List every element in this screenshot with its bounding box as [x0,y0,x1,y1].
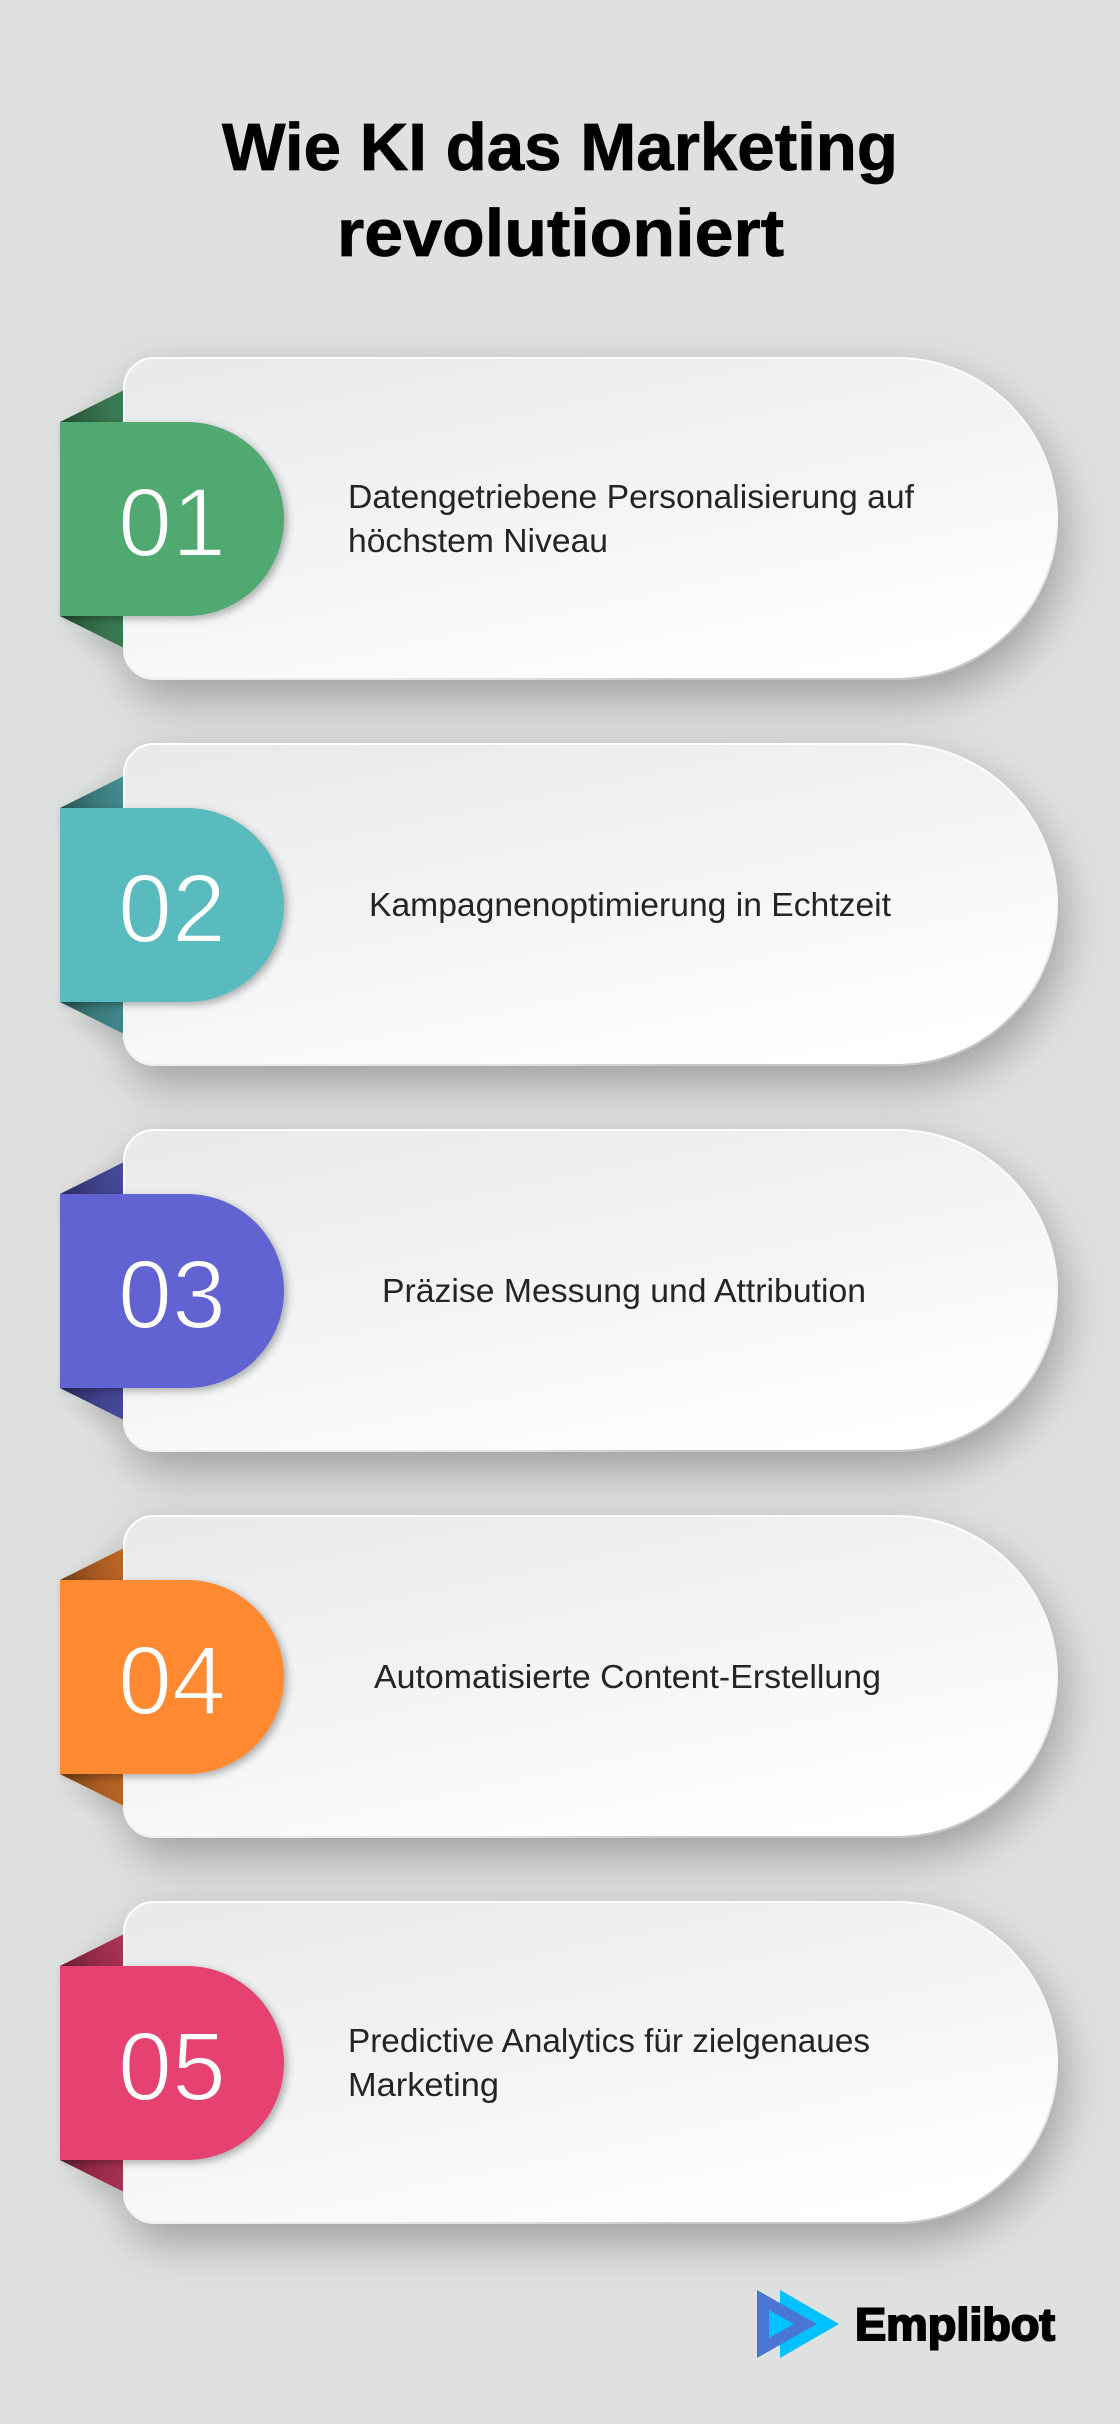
number badge 01: 01 [118,468,226,577]
wordmark: Emplibot [855,2299,1055,2350]
card 01 [124,358,1057,679]
card 04 [124,1516,1057,1837]
text 01: Datengetriebene Personalisierung auf [348,479,915,516]
text 04: Automatisierte Content-Erstellung [374,1659,881,1696]
text 05: Predictive Analytics für zielgenaues [348,2023,870,2060]
fold ribbon 04 [60,1548,124,1806]
number badge 05 [60,1966,284,2160]
title: Wie KI das Marketing [222,110,898,185]
fold ribbon 03 [60,1162,124,1420]
card 02 [124,744,1057,1065]
panel: step 03 [60,1130,1057,1451]
card 05 [124,1902,1057,2223]
panel: step 04 [60,1516,1057,1837]
icon: double play triangles [757,2290,839,2358]
text 01 [348,479,915,560]
text 05 [348,2023,870,2104]
number badge 04 [60,1580,284,1774]
text 03: Präzise Messung und Attribution [382,1273,866,1310]
number badge 01 [60,422,284,616]
number badge 02 [60,808,284,1002]
panel: step 05 [60,1902,1057,2223]
panel: step 02 [60,744,1057,1065]
text 05: Marketing [348,2067,499,2104]
text 02: Kampagnenoptimierung in Echtzeit [369,887,892,924]
title [222,110,898,271]
fold ribbon 05 [60,1934,124,2192]
title: revolutioniert [337,196,784,271]
number badge 04: 04 [118,1626,226,1735]
panel: step 01 [60,358,1057,679]
number badge 03 [60,1194,284,1388]
number badge 03: 03 [118,1240,226,1349]
number badge 02: 02 [118,854,226,963]
logo: Emplibot [757,2290,1055,2358]
fold ribbon 01 [60,390,124,648]
fold ribbon 02 [60,776,124,1034]
card 03 [124,1130,1057,1451]
text 01: höchstem Niveau [348,523,608,560]
number badge 05: 05 [118,2012,226,2121]
